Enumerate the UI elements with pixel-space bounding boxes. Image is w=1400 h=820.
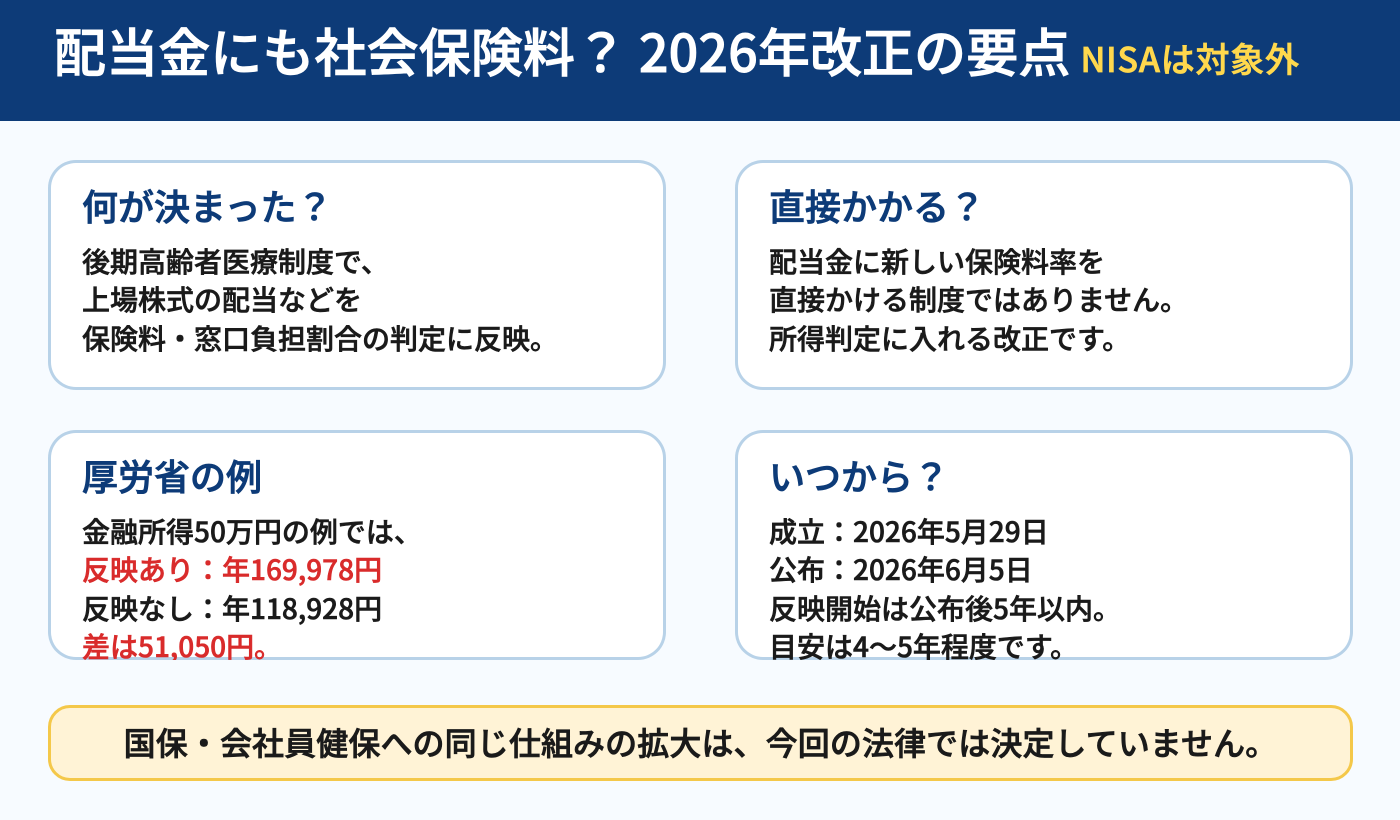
callout: bottom note bbox=[48, 705, 1353, 781]
text block: timing: 反映開始は公布後5年以内。 bbox=[769, 588, 1121, 628]
text block: timing: 成立：2026年5月29日 bbox=[769, 511, 1049, 551]
text block: direct charge: 所得判定に入れる改正です。 bbox=[769, 318, 1130, 358]
text block: ministry example bbox=[82, 511, 422, 660]
text block: timing: 公布：2026年6月5日 bbox=[769, 549, 1033, 589]
text block: ministry example: 金融所得50万円の例では、 bbox=[82, 511, 422, 551]
text block: what was decided: 後期高齢者医療制度で、 bbox=[82, 241, 389, 281]
heading: ministry example: 厚労省の例 bbox=[82, 449, 262, 501]
callout: bottom note: 国保・会社員健保への同じ仕組みの拡大は、今回の法律では決定していません。 bbox=[124, 719, 1277, 765]
text block: direct charge: 配当金に新しい保険料率を bbox=[769, 241, 1105, 281]
panel: what was decided bbox=[48, 160, 666, 390]
text block: ministry example: 反映あり：年169,978円 bbox=[82, 549, 382, 589]
text block: what was decided: 上場株式の配当などを bbox=[82, 279, 362, 319]
text block: ministry example: 反映なし：年118,928円 bbox=[82, 588, 382, 628]
heading: direct charge: 直接かかる？ bbox=[769, 179, 985, 231]
text block: timing bbox=[769, 511, 1121, 660]
title: 配当金にも社会保険料？ 2026年改正の要点 NISAは対象外 bbox=[54, 12, 1300, 87]
text block: direct charge: 直接かける制度ではありません。 bbox=[769, 279, 1188, 319]
panel: ministry example bbox=[48, 430, 666, 660]
heading: what was decided: 何が決まった？ bbox=[82, 179, 333, 231]
text block: what was decided bbox=[82, 241, 558, 358]
text block: direct charge bbox=[769, 241, 1188, 358]
text block: what was decided: 保険料・窓口負担割合の判定に反映。 bbox=[82, 318, 558, 358]
heading: timing: いつから？ bbox=[769, 449, 949, 501]
panel: direct charge bbox=[735, 160, 1353, 390]
header band bbox=[0, 0, 1400, 121]
panel: timing bbox=[735, 430, 1353, 660]
